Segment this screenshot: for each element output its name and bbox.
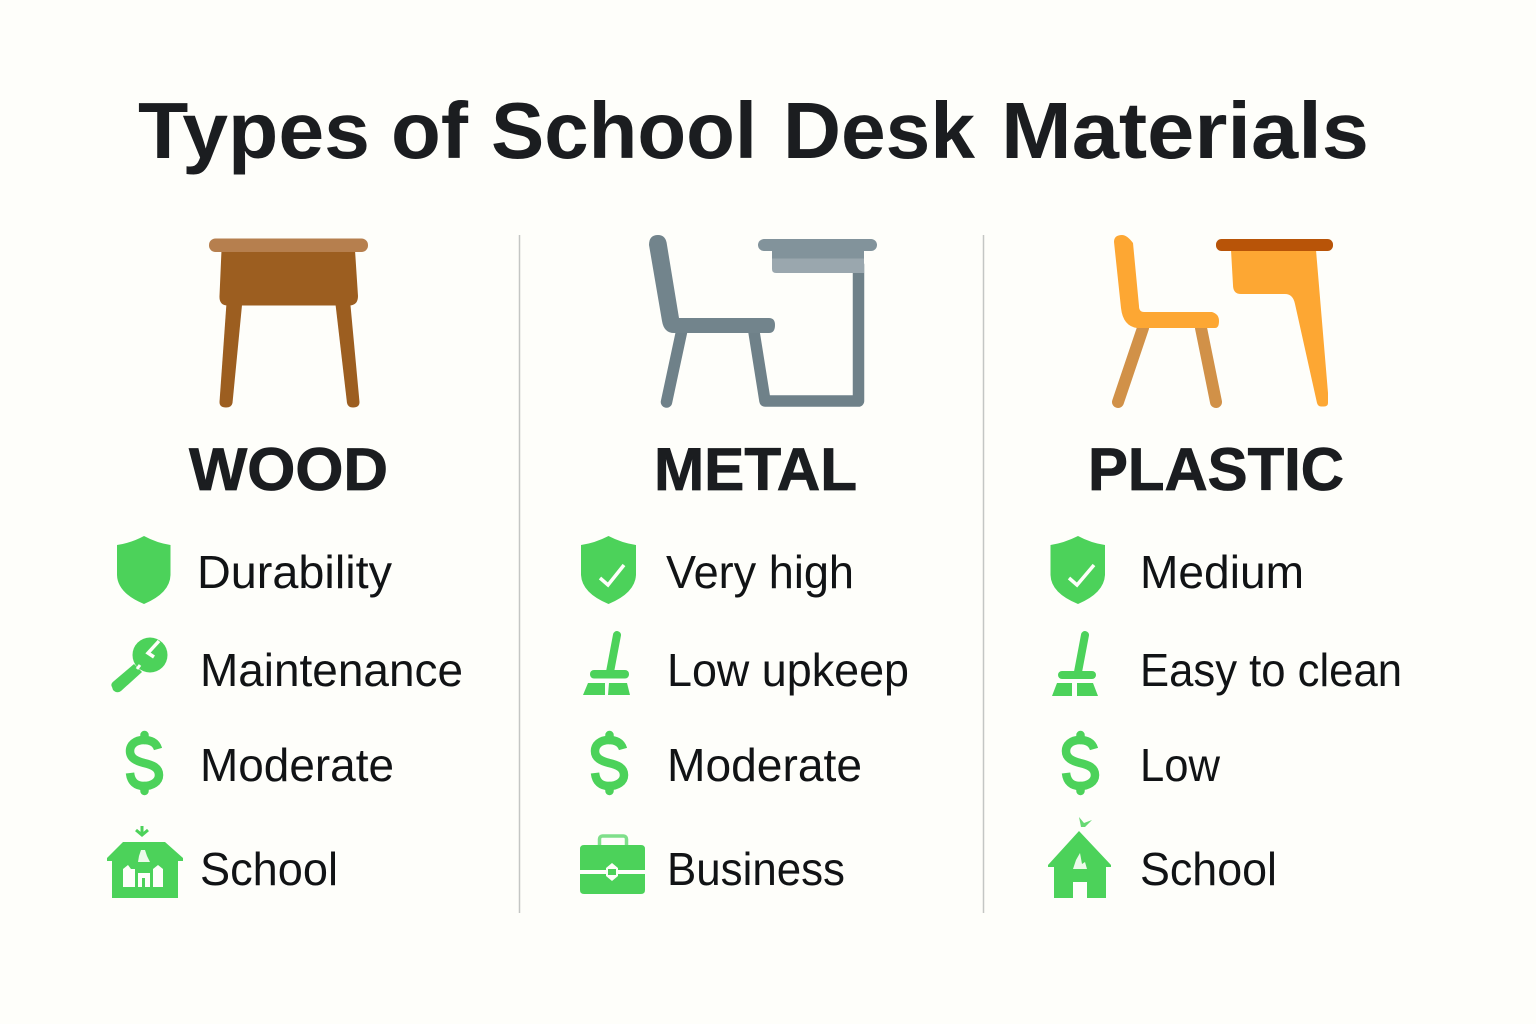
title: Materials — [1001, 86, 1369, 175]
icon: broom — [583, 635, 630, 695]
panel: wood — [107, 238, 463, 898]
label: use: Business — [667, 843, 845, 895]
label: maintenance: Low upkeep — [667, 644, 909, 696]
title: Types — [138, 86, 370, 175]
heading: metal: METAL — [654, 436, 857, 503]
heading: plastic: PLASTIC — [1088, 436, 1344, 503]
icon: shield — [117, 536, 170, 604]
icon: dollar — [130, 735, 159, 791]
label: cost: Moderate — [667, 739, 862, 791]
label: use: School — [1140, 843, 1277, 895]
icon: wrench — [111, 638, 168, 692]
icon: shield with check — [1050, 536, 1105, 604]
title: of — [391, 86, 468, 175]
illustration: metal chair and desk — [649, 235, 877, 402]
illustration: plastic chair and desk — [1114, 235, 1333, 406]
label: use: School — [200, 843, 338, 895]
icon: briefcase — [580, 836, 645, 894]
icon: dollar — [1066, 735, 1095, 791]
panel: plastic — [1048, 235, 1402, 898]
icon: dollar — [595, 735, 624, 791]
title: School — [491, 86, 757, 175]
icon: shield with check — [581, 536, 636, 604]
title: Desk — [783, 86, 976, 175]
label: maintenance: Maintenance — [200, 644, 463, 696]
label: durability: Medium — [1140, 546, 1304, 598]
icon: school house — [1048, 817, 1111, 898]
illustration: wood desk — [209, 238, 368, 408]
icon: school building — [107, 826, 183, 898]
panel: metal — [580, 235, 909, 895]
title — [138, 86, 1369, 175]
icon: broom — [1052, 635, 1098, 696]
label: maintenance: Easy to clean — [1140, 644, 1402, 696]
heading: wood: WOOD — [189, 436, 388, 503]
label: durability: Very high — [666, 546, 854, 598]
label: cost: Low — [1140, 739, 1221, 791]
label: durability: Durability — [197, 546, 392, 598]
label: cost: Moderate — [200, 739, 394, 791]
